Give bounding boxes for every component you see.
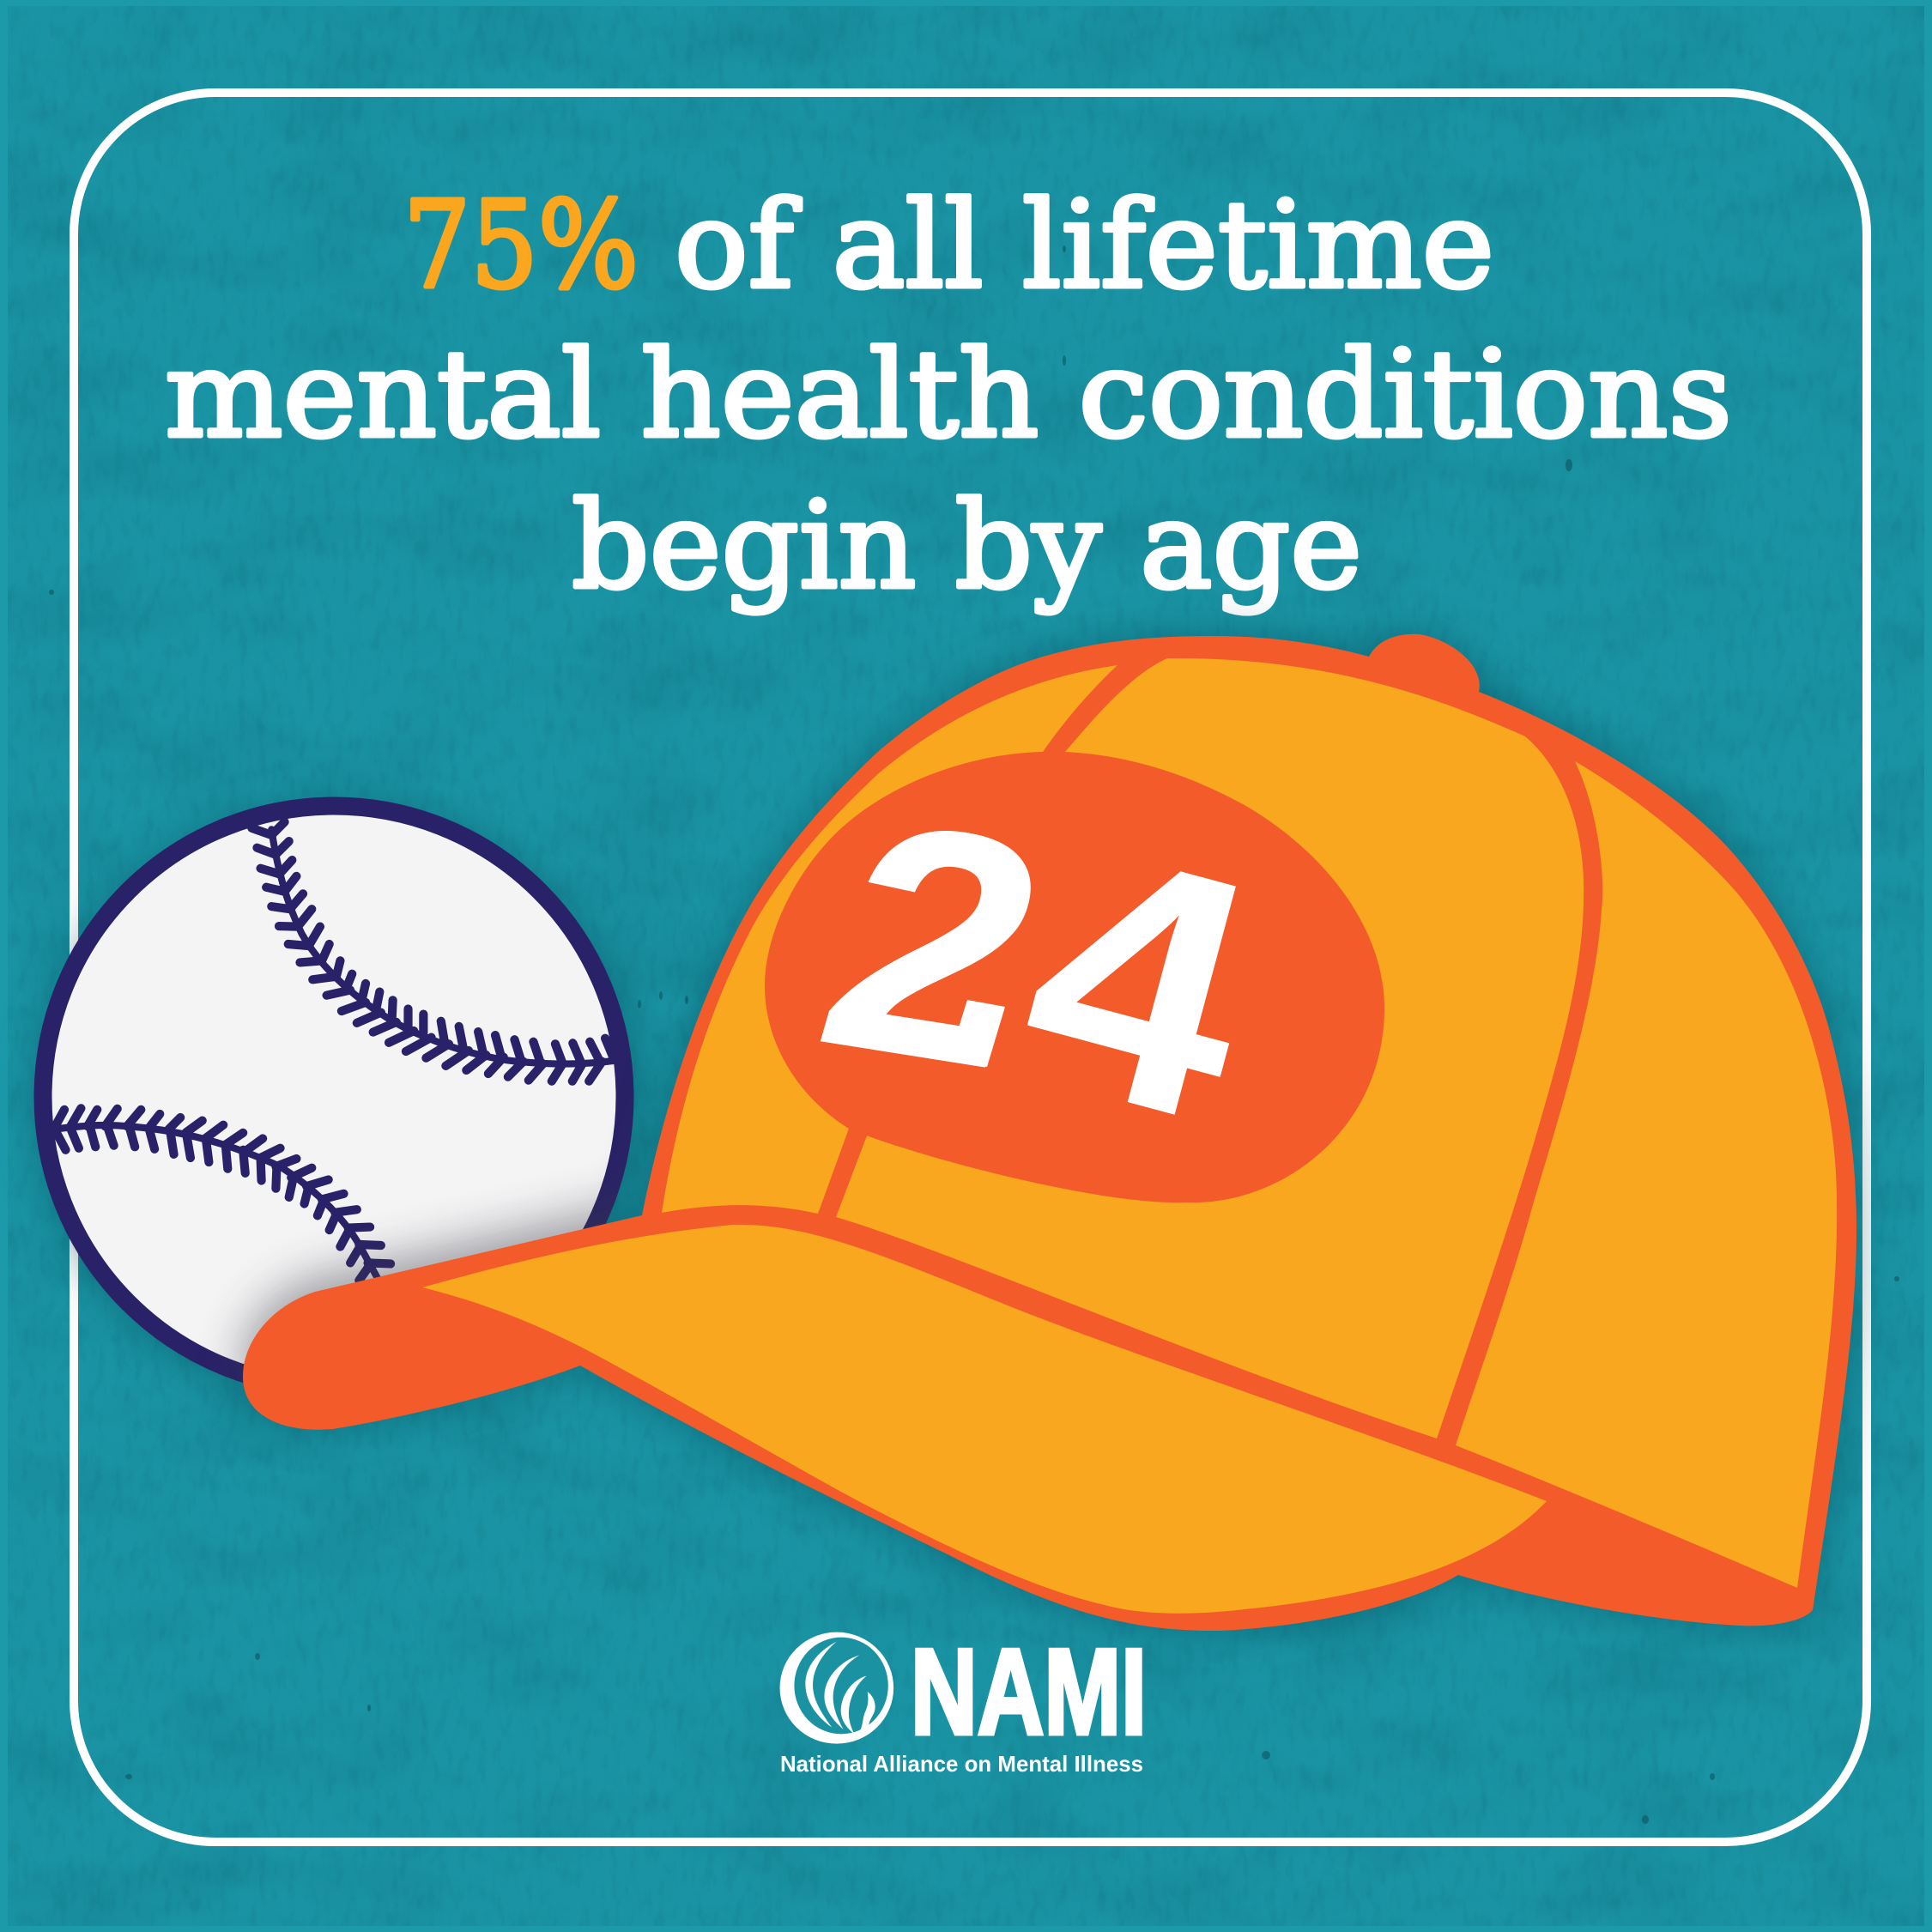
cap left panel — [662, 665, 1117, 1214]
number 24 — [789, 752, 1293, 1196]
cap right panel — [1456, 761, 1837, 1588]
title — [165, 176, 1732, 616]
icon: baseball — [34, 796, 633, 1384]
NAMI logo — [780, 1624, 1147, 1777]
cap number patch — [765, 752, 1384, 1202]
ball body — [43, 806, 625, 1388]
number 24: 4 — [990, 770, 1293, 1196]
cap brim — [422, 1225, 1547, 1614]
logo emblem — [780, 1632, 893, 1744]
title: 75% — [403, 176, 639, 316]
cap silhouette — [243, 634, 1856, 1631]
title: of all lifetime — [675, 176, 1494, 316]
ball stitching — [52, 822, 615, 1281]
icon: baseball cap — [243, 634, 1856, 1631]
drop shadow behind ball and hat — [37, 634, 1856, 1631]
title: mental health conditions — [165, 325, 1732, 465]
number 24: 2 — [789, 752, 1081, 1137]
logo tagline: National Alliance on Mental Illness — [780, 1751, 1143, 1777]
logo wordmark: NAMI — [911, 1624, 1147, 1760]
shadow cast on ball by hat brim — [216, 1177, 615, 1365]
cap center panel — [836, 658, 1584, 1438]
title: begin by age — [572, 476, 1362, 616]
